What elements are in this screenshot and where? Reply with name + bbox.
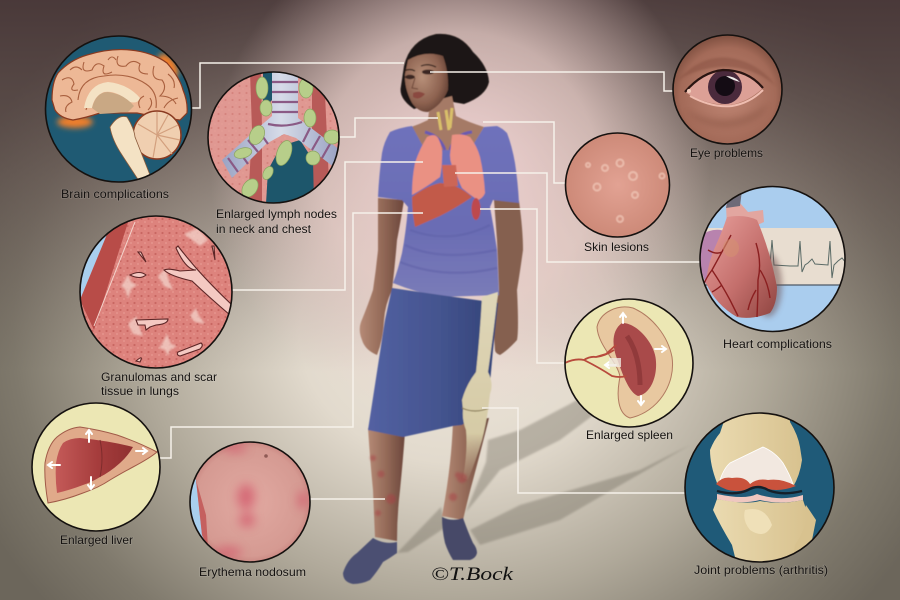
rash spots on legs [370, 455, 467, 516]
connector: joint [482, 408, 685, 493]
panel: skin lesions [566, 133, 670, 237]
dark mediastinum [266, 140, 314, 204]
panel: eye [673, 35, 783, 145]
aorta [726, 203, 764, 224]
splenic artery [565, 345, 626, 377]
internal organs [412, 108, 485, 227]
ring [190, 442, 310, 562]
ring [566, 133, 670, 237]
panel: erythema nodosum [188, 442, 310, 562]
label: skin lesions: Skin lesions [584, 240, 649, 254]
connector: brain [192, 63, 404, 108]
central figure [343, 34, 523, 584]
lower lid [690, 90, 763, 106]
left shoe [343, 538, 397, 584]
ring [208, 72, 339, 203]
connector: lymph nodes [339, 118, 438, 137]
pupil [715, 76, 735, 96]
signature: ©T.Bock [431, 564, 514, 585]
left arm [360, 198, 404, 355]
label: lymph nodes [216, 207, 337, 236]
cerebrum [52, 50, 187, 120]
growth arrows [605, 313, 666, 405]
pleural band [81, 222, 128, 330]
right leg [442, 418, 489, 520]
label: lymph nodes: in neck and chest [216, 222, 312, 236]
corpus callosum [84, 82, 140, 108]
fibula [790, 505, 816, 560]
label: spleen: Enlarged spleen [586, 428, 673, 442]
panel: lymph nodes [208, 72, 340, 204]
scar tissue patches [121, 228, 208, 356]
spleen [472, 198, 480, 220]
skirt [368, 288, 498, 437]
liver [56, 438, 133, 493]
right shoe [442, 517, 477, 560]
label: eye: Eye problems [690, 146, 763, 160]
sclera [685, 70, 763, 105]
panel: brain [45, 36, 192, 182]
leg bone: femur, knee and tibia [462, 292, 498, 480]
tibia [713, 499, 808, 565]
hair [401, 34, 489, 109]
panel: joint [685, 412, 835, 565]
floor shadow of figure [397, 358, 690, 553]
airways [130, 246, 232, 362]
red nodules [214, 444, 308, 557]
shirt folds [400, 225, 497, 273]
lesions [586, 160, 664, 222]
trachea and bronchi [222, 72, 340, 178]
highlight [726, 76, 740, 82]
facial features [404, 65, 436, 98]
connector: eye [430, 72, 673, 91]
ring [685, 413, 834, 562]
panel: spleen [565, 299, 693, 427]
growth arrows [48, 430, 147, 489]
label: brain: Brain complications [61, 187, 169, 201]
face [405, 54, 448, 112]
left leg [368, 428, 405, 541]
panel: heart [699, 186, 846, 333]
label: lung granulomas: tissue in lungs [101, 384, 179, 398]
ring [32, 403, 160, 531]
connector: erythema [309, 498, 385, 500]
heart shadow [754, 253, 782, 317]
heart body [706, 216, 777, 318]
right lung [450, 134, 485, 200]
joint gap [717, 487, 802, 493]
liver [412, 183, 472, 227]
blood vessels [425, 132, 472, 150]
iris [708, 70, 742, 104]
inflamed edge [716, 478, 796, 491]
connector: liver [160, 213, 423, 458]
green lymph nodes [233, 77, 340, 200]
ECG trace [770, 240, 846, 278]
ring [565, 299, 693, 427]
heart [442, 165, 458, 187]
connector: lungs [232, 162, 423, 290]
label: erythema nodosum: Erythema nodosum [199, 565, 306, 579]
purple atrium [699, 230, 730, 284]
enlarged liver outline [45, 427, 157, 503]
panel: lung granulomas [70, 216, 232, 368]
brainstem [110, 116, 150, 181]
t-shirt [378, 126, 519, 297]
orange inflammation glow [57, 50, 183, 128]
vessel bands [249, 74, 262, 202]
ring [673, 35, 782, 144]
panel: liver [32, 403, 160, 531]
skin edge [190, 479, 204, 539]
coronary vessels [704, 235, 770, 317]
tibial cartilage [717, 494, 803, 502]
label: joint: Joint problems (arthritis) [694, 563, 828, 577]
thalamus [92, 92, 134, 114]
enlarged spleen outline [597, 307, 673, 418]
lash line [685, 70, 763, 92]
blue background sliver [80, 236, 106, 297]
connector: skin [483, 122, 566, 183]
connector: heart [455, 173, 700, 262]
label: lung granulomas [101, 370, 217, 398]
connector lines [160, 63, 700, 499]
label: liver: Enlarged liver [60, 533, 133, 547]
spleen [614, 323, 656, 396]
label: lung granulomas: Granulomas and scar [101, 370, 217, 384]
label: heart: Heart complications [723, 337, 832, 351]
worn cartilage [720, 447, 793, 484]
connector: spleen [480, 209, 565, 363]
ring [80, 216, 232, 368]
femur [710, 412, 802, 487]
label: lymph nodes: Enlarged lymph nodes [216, 207, 337, 221]
neck lymph structures [438, 108, 452, 130]
brain folds [60, 56, 178, 112]
cerebellum [133, 111, 181, 159]
ring [700, 186, 845, 332]
ECG strip [700, 228, 846, 285]
right arm [493, 200, 523, 355]
neck and chest [411, 96, 484, 165]
left lung [412, 135, 442, 195]
ring [46, 36, 192, 182]
